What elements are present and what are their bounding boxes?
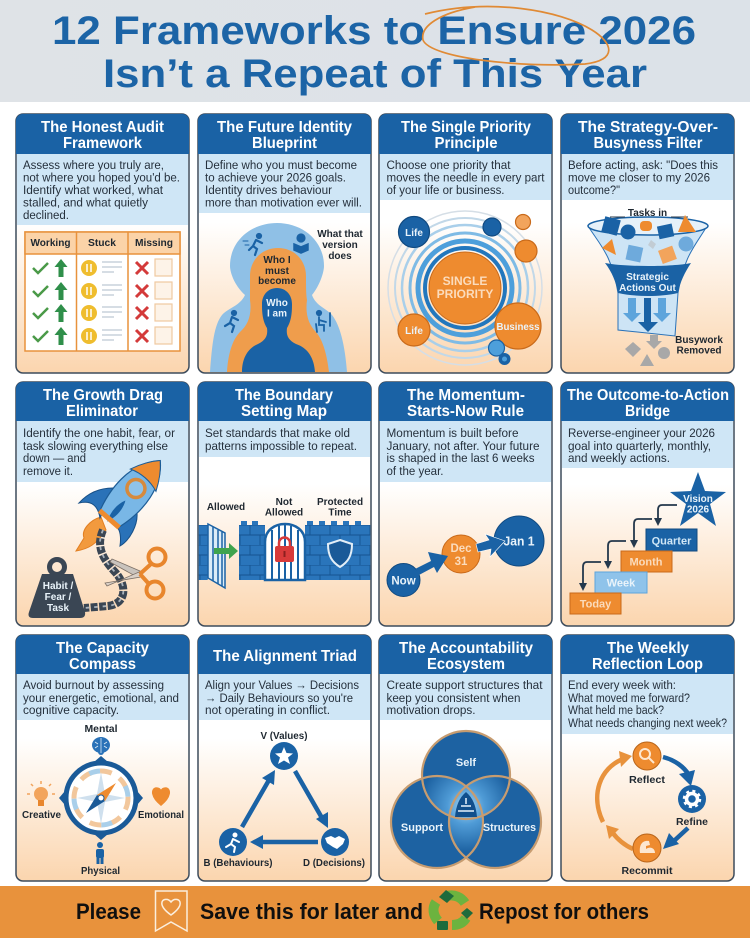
heading — [43, 387, 163, 420]
description: more than motivation ever will. — [205, 196, 362, 210]
heading — [56, 640, 149, 673]
description: Identity drives behaviour — [205, 183, 332, 197]
funnel diagram — [588, 208, 723, 366]
panel: The Single Priority Principle — [379, 114, 552, 373]
scissors — [105, 548, 166, 598]
triad diagram — [204, 731, 365, 869]
description — [205, 158, 362, 210]
chain — [84, 530, 123, 608]
weight: Habit / — [43, 581, 73, 592]
staircase diagram: Month — [630, 556, 663, 568]
venn diagram: Support — [401, 822, 443, 834]
panel: The Outcome-to-Action Bridge — [561, 382, 734, 626]
momentum diagram: Dec — [450, 543, 472, 555]
text: please: Please — [76, 899, 141, 924]
description: What held me back? — [568, 703, 664, 717]
description: End every week with: — [568, 678, 676, 692]
priority diagram: Business — [496, 322, 540, 333]
funnel diagram: Removed — [676, 346, 722, 356]
heading: Principle — [434, 135, 498, 152]
description — [23, 426, 175, 478]
wall labels — [207, 497, 363, 518]
description — [23, 158, 180, 222]
heading: The Honest Audit — [41, 119, 164, 136]
compass labels: Creative — [22, 810, 61, 821]
description: goal into quarterly, monthly, — [568, 439, 711, 453]
heading: Blueprint — [252, 135, 317, 152]
output arrows — [623, 298, 671, 332]
description: remove it. — [23, 464, 73, 478]
venn diagram: Self — [456, 757, 476, 769]
triad diagram: D (Decisions) — [303, 858, 365, 869]
heading: Compass — [69, 656, 136, 673]
description: cognitive capacity. — [23, 703, 119, 717]
heading: Setting Map — [241, 403, 327, 420]
loop diagram — [597, 742, 708, 877]
momentum diagram: 31 — [455, 556, 468, 568]
staircase diagram: Week — [607, 578, 636, 590]
icon: brain — [92, 737, 110, 755]
audit table — [25, 232, 180, 351]
heading — [399, 640, 533, 673]
priority diagram: SINGLE — [443, 274, 487, 288]
heading: Busyness Filter — [594, 135, 702, 152]
panel: The Weekly Reflection Loop — [561, 635, 734, 881]
heading: The Capacity — [56, 640, 149, 657]
panel: The Alignment Triad — [198, 635, 371, 881]
priority diagram: Life — [405, 228, 423, 239]
description: Choose one priority that — [386, 158, 511, 172]
loop diagram: Refine — [676, 817, 708, 828]
weight — [28, 560, 85, 618]
wall labels: Not — [276, 497, 293, 508]
heading: Ecosystem — [427, 656, 505, 673]
weight: Fear / — [45, 592, 72, 603]
heading: The Future Identity — [217, 119, 352, 136]
compass labels: Mental — [84, 724, 118, 735]
wall labels: Allowed — [265, 508, 303, 518]
description — [23, 678, 179, 717]
title — [52, 9, 696, 96]
icon: heart — [153, 788, 169, 805]
rocket illustration — [28, 449, 173, 618]
description: patterns impossible to repeat. — [205, 439, 357, 453]
heading: The Outcome-to-Action — [567, 387, 729, 404]
heading — [217, 119, 352, 152]
heading: Eliminator — [66, 403, 138, 420]
busywork debris — [625, 335, 670, 366]
heading: Starts-Now Rule — [407, 403, 524, 420]
title: Isn’t a Repeat of This Year — [103, 52, 647, 96]
rocket body — [94, 449, 173, 533]
description: January, not after. Your future — [386, 439, 540, 453]
icon: bookmark with heart — [156, 891, 187, 931]
identity silhouettes: Who I — [263, 255, 291, 266]
heading: The Weekly — [607, 640, 689, 657]
loop diagram: Reflect — [629, 775, 666, 786]
description — [386, 426, 540, 478]
wall labels: Protected — [317, 497, 363, 508]
wall labels: Time — [328, 508, 352, 518]
header band — [0, 0, 750, 102]
description: → Daily Behaviours so you're — [205, 691, 353, 705]
panel: The Honest Audit Framework — [16, 114, 189, 373]
heading — [401, 119, 531, 152]
heading — [41, 119, 164, 152]
description: and weekly actions. — [568, 451, 670, 465]
funnel diagram: Actions Out — [619, 283, 676, 294]
compass — [59, 756, 143, 840]
heading: Framework — [63, 135, 142, 152]
panel: The Momentum-Starts-Now Rule — [379, 382, 552, 626]
staircase diagram: 2026 — [687, 504, 710, 516]
row icons — [33, 259, 172, 345]
description — [568, 426, 715, 465]
identity silhouettes — [210, 223, 363, 372]
description: move me closer to my 2026 — [568, 170, 710, 184]
description: Set standards that make old — [205, 426, 350, 440]
panel: The Future Identity Blueprint — [198, 114, 371, 373]
nodes — [633, 742, 661, 770]
description: down — and — [23, 451, 86, 465]
identity silhouettes: I am — [267, 308, 287, 320]
identity silhouettes: version — [322, 240, 358, 251]
description: is shaped in the last 6 weeks — [386, 451, 534, 465]
nodes — [270, 742, 298, 770]
audit table: Working — [30, 238, 70, 249]
heading — [592, 640, 703, 673]
description: motivation drops. — [386, 703, 476, 717]
description: Identify the one habit, fear, or — [23, 426, 175, 440]
description: Avoid burnout by assessing — [23, 678, 164, 692]
identity silhouettes: does — [328, 251, 352, 262]
funnel diagram: Strategic — [626, 272, 669, 283]
icon: runners, reader and desk worker — [225, 234, 330, 332]
panel: The Boundary Setting Map — [198, 382, 371, 626]
compass labels: Emotional — [138, 810, 184, 821]
heading: The Alignment Triad — [213, 648, 357, 665]
panel: The Accountability Ecosystem — [379, 635, 552, 881]
satellite circles — [398, 214, 541, 365]
description — [205, 426, 357, 453]
description: Align your Values → Decisions — [205, 678, 359, 692]
description: not where you hoped you'd be. — [23, 170, 180, 184]
identity silhouettes: become — [258, 276, 296, 287]
description: keep you consistent when — [386, 691, 520, 705]
wall labels: Allowed — [207, 502, 245, 513]
description: your energetic, emotional, and — [23, 691, 179, 705]
flame — [76, 517, 106, 551]
step arrows — [583, 505, 677, 584]
description: of the year. — [386, 464, 444, 478]
icon: light bulb — [27, 781, 55, 806]
heading: The Growth Drag — [43, 387, 163, 404]
icon: red padlock — [275, 538, 294, 562]
priority diagram — [388, 211, 542, 365]
momentum diagram — [387, 516, 544, 596]
description: What needs changing next week? — [568, 716, 727, 730]
arrows — [416, 552, 448, 575]
description: Create support structures that — [386, 678, 543, 692]
arrows — [242, 771, 322, 842]
identity silhouettes: must — [265, 266, 290, 277]
triad diagram: B (Behaviours) — [204, 858, 272, 869]
hand-drawn orange ellipse — [423, 7, 609, 65]
task shapes — [601, 215, 696, 264]
funnel diagram: Busywork — [675, 335, 723, 346]
description: Assess where you truly are, — [23, 158, 164, 172]
castle wall — [199, 521, 370, 588]
heading: The Boundary — [235, 387, 333, 404]
funnel diagram: Tasks in — [628, 208, 667, 219]
description: What moved me forward? — [568, 691, 690, 705]
text: repost: Repost for others — [479, 899, 649, 924]
icon: recycle — [434, 890, 473, 930]
heading: The Strategy-Over- — [578, 119, 718, 136]
momentum diagram: Jan 1 — [504, 534, 534, 548]
heading — [578, 119, 718, 152]
compass labels — [22, 724, 184, 877]
staircase diagram: Quarter — [652, 536, 692, 548]
loop diagram: Recommit — [622, 866, 673, 877]
priority diagram: PRIORITY — [437, 287, 493, 301]
compass labels: Physical — [81, 866, 120, 877]
description: Identify what worked, what — [23, 183, 164, 197]
description: moves the needle in every part — [386, 170, 545, 184]
description — [386, 158, 545, 197]
description: stalled, and what quietly — [23, 196, 149, 210]
description: of your life or business. — [386, 183, 504, 197]
heading: The Single Priority — [401, 119, 531, 136]
staircase diagram: Vision — [683, 494, 713, 505]
description — [205, 678, 359, 717]
identity silhouettes: Who — [266, 298, 288, 309]
panel: The Growth Drag Eliminator — [16, 382, 189, 626]
description: Before acting, ask: "Does this — [568, 158, 718, 172]
description: declined. — [23, 208, 69, 222]
arrows — [597, 757, 689, 849]
description: to achieve your 2026 goals. — [205, 170, 346, 184]
heading: The Momentum- — [407, 387, 525, 404]
panel: The Strategy-Over-Busyness Filter — [561, 114, 734, 373]
momentum diagram: Now — [391, 576, 416, 588]
icon: person — [96, 842, 104, 864]
description: task slowing everything else — [23, 439, 168, 453]
description: Momentum is built before — [386, 426, 519, 440]
barred gate — [265, 524, 305, 580]
heading — [235, 387, 333, 420]
triad diagram: V (Values) — [260, 731, 308, 742]
text: save: Save this for later and — [200, 899, 423, 924]
staircase diagram: Today — [580, 598, 612, 610]
heading: Bridge — [625, 403, 670, 420]
description: Reverse-engineer your 2026 — [568, 426, 715, 440]
description: not operating in conflict. — [205, 703, 330, 717]
panel: The Capacity Compass — [16, 635, 189, 881]
staircase diagram — [570, 472, 726, 614]
weight: Task — [47, 603, 69, 614]
heading — [407, 387, 525, 420]
identity silhouettes: What that — [317, 229, 363, 240]
heading — [567, 387, 729, 420]
venn diagram — [391, 731, 541, 868]
description — [568, 158, 718, 197]
heading: Reflection Loop — [592, 656, 703, 673]
heading: The Accountability — [399, 640, 533, 657]
fins — [79, 488, 113, 518]
description: outcome?" — [568, 183, 620, 197]
arrow: allowed — [214, 543, 238, 559]
venn diagram: Structures — [483, 822, 536, 834]
title: 12 Frameworks to Ensure 2026 — [52, 9, 696, 53]
audit table: Missing — [135, 238, 173, 249]
description — [386, 678, 543, 717]
footer band — [0, 886, 750, 938]
icon: shield — [328, 540, 352, 567]
priority diagram: Life — [405, 326, 423, 337]
description — [568, 678, 727, 730]
description: Define who you must become — [205, 158, 357, 172]
audit table: Stuck — [88, 238, 116, 249]
